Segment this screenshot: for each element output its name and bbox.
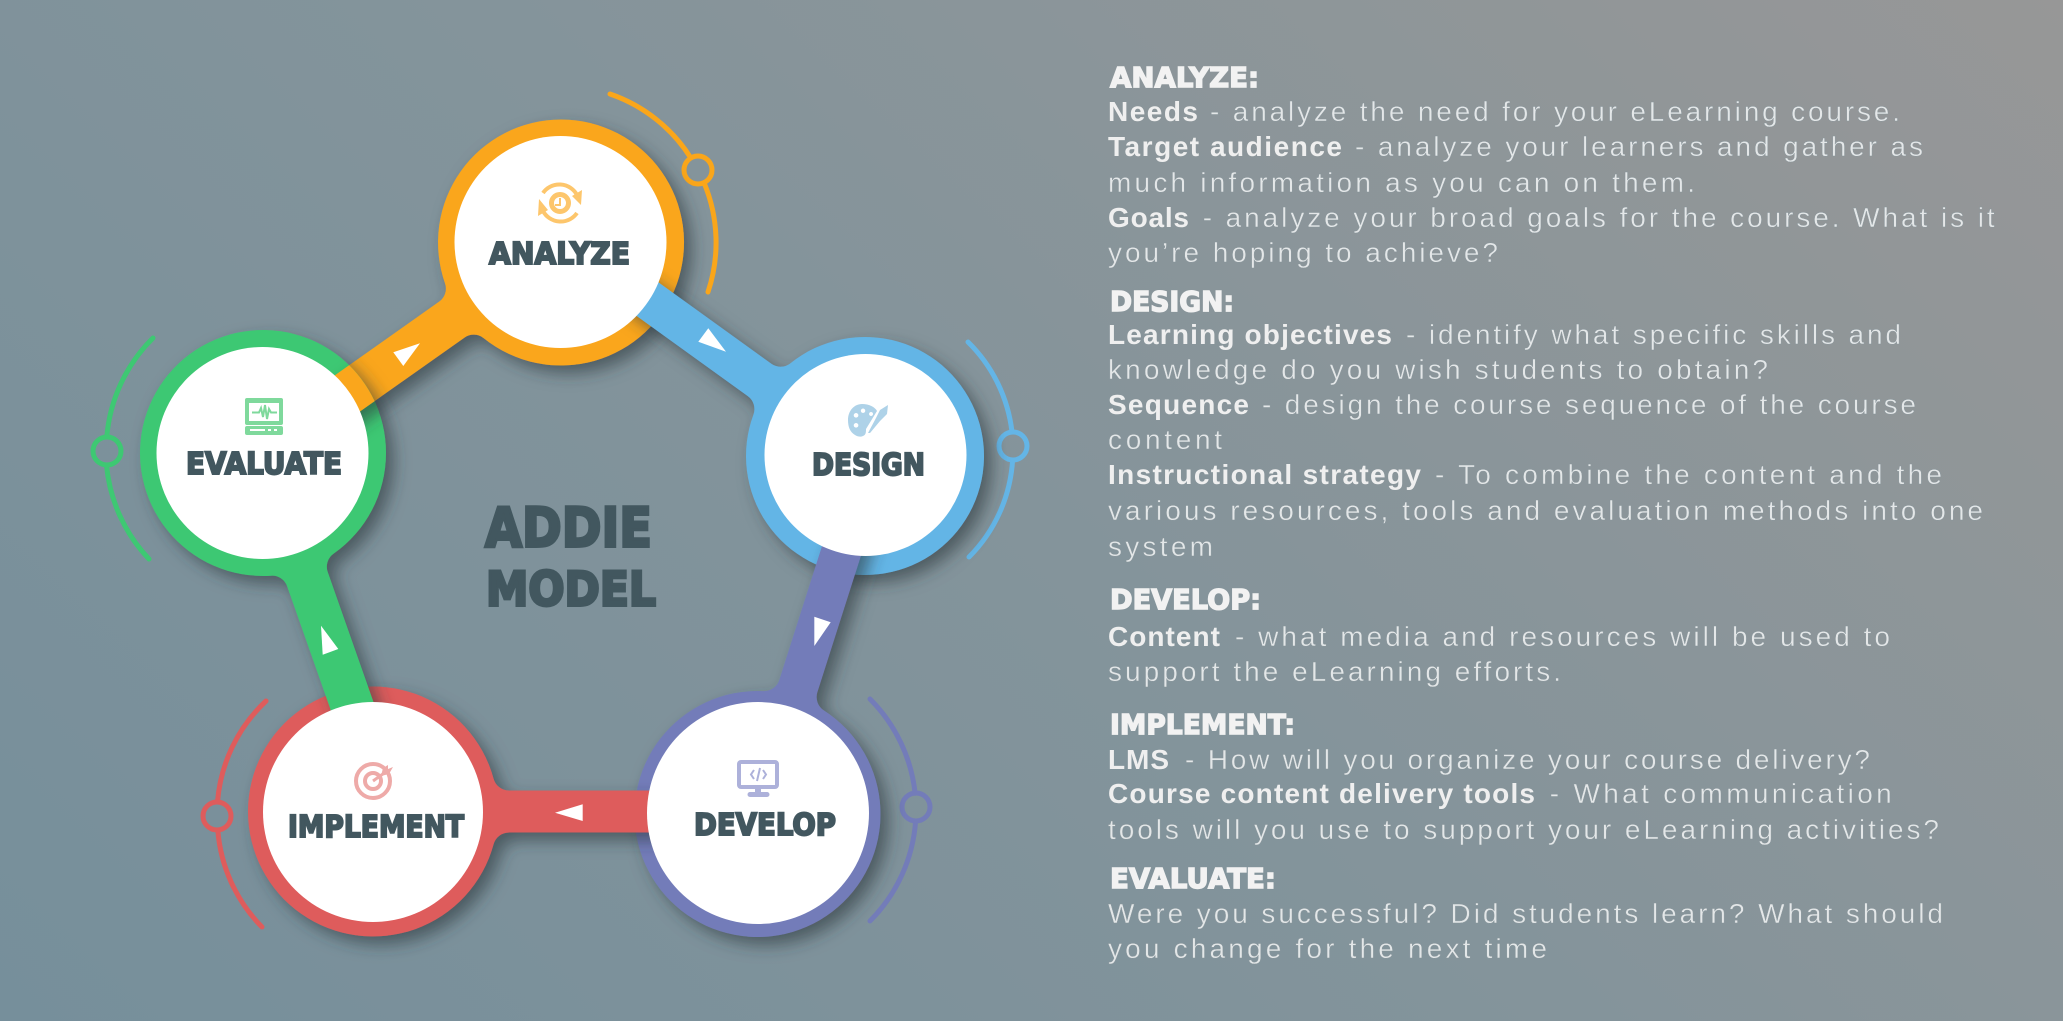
heading: implement: IMPLEMENT: — [1110, 708, 1295, 741]
ring and connector: analyze — [241, 71, 732, 519]
label: design: DESIGN — [812, 448, 925, 483]
arrow: design to develop — [814, 617, 831, 646]
node: evaluate — [156, 347, 368, 559]
text block: analyze: - analyze your learners and gather as — [1355, 131, 1923, 162]
icon: pulse monitor — [245, 398, 283, 435]
text block: develop: - what media and resources will be used to — [1235, 621, 1890, 652]
arrow: develop to implement — [555, 804, 583, 821]
title: addie model: MODEL — [486, 562, 656, 618]
node: design — [764, 354, 966, 556]
ring and connector: develop — [603, 487, 967, 969]
text block: analyze: Goals — [1108, 202, 1189, 233]
ring and connector: design — [552, 184, 1031, 622]
text block: analyze: Needs — [1108, 96, 1198, 127]
text block: design: Instructional strategy — [1108, 459, 1421, 490]
text block: design: various resources, tools and evaluation methods into one — [1108, 495, 1983, 526]
text block: design: - design the course sequence of the course — [1262, 389, 1916, 420]
text block: design: - identify what specific skills and — [1406, 319, 1901, 350]
text block: design: system — [1108, 531, 1213, 562]
text block: implement — [1108, 708, 1939, 845]
text block: analyze: - analyze the need for your eLearning course. — [1210, 96, 1900, 127]
text block: develop — [1108, 583, 1890, 687]
decorative arc: implement — [203, 701, 266, 927]
arrow: analyze to design — [698, 328, 726, 352]
decorative arc: evaluate — [93, 338, 153, 559]
decorative arc: analyze — [610, 94, 716, 292]
text block: implement: tools will you use to support your eLearning activities? — [1108, 814, 1939, 845]
icon: target — [356, 764, 393, 798]
text block: implement: - How will you organize your course delivery? — [1185, 744, 1870, 775]
text block: evaluate — [1108, 862, 1943, 964]
text block: design: content — [1108, 424, 1222, 455]
heading: design: DESIGN: — [1110, 285, 1234, 318]
text block: analyze: much information as you can on them. — [1108, 167, 1695, 198]
text block: design: knowledge do you wish students to obtain? — [1108, 354, 1768, 385]
text block: analyze: - analyze your broad goals for the course. What is it — [1203, 202, 1995, 233]
node: develop — [647, 702, 869, 924]
text block: analyze — [1108, 61, 1995, 268]
label: evaluate: EVALUATE — [186, 447, 342, 482]
text block: develop: support the eLearning efforts. — [1108, 656, 1561, 687]
title: addie model: ADDIE — [485, 496, 652, 560]
text block: design: Learning objectives — [1108, 319, 1392, 350]
heading: evaluate: EVALUATE: — [1110, 862, 1276, 895]
heading: develop: DEVELOP: — [1110, 583, 1261, 616]
text block: analyze: you’re hoping to achieve? — [1108, 237, 1498, 268]
label: implement: IMPLEMENT — [288, 810, 464, 845]
label: analyze: ANALYZE — [489, 237, 630, 272]
decorative arc: develop — [870, 699, 930, 921]
ring and connector: implement — [248, 686, 673, 936]
heading: analyze: ANALYZE: — [1110, 61, 1259, 94]
text block: design — [1108, 285, 1983, 562]
title: addie model — [485, 496, 656, 618]
icon: palette — [848, 404, 888, 437]
arrow: implement to evaluate — [321, 626, 338, 655]
text block: implement: LMS — [1108, 744, 1169, 775]
ring and connector: evaluate — [106, 296, 479, 777]
node: analyze — [454, 136, 666, 348]
arrow: evaluate to analyze — [393, 343, 420, 366]
text block: evaluate: you change for the next time — [1108, 933, 1547, 964]
orange connector overlapping evaluate ring — [334, 365, 382, 434]
text block: implement: Course content delivery tools — [1108, 778, 1535, 809]
text block: develop: Content — [1108, 621, 1220, 652]
icon: cycle clock — [538, 184, 582, 222]
icon: code monitor — [739, 762, 777, 794]
label: develop: DEVELOP — [694, 808, 836, 843]
text block: evaluate: Were you successful? Did students learn? What should — [1108, 898, 1943, 929]
text block: design: - To combine the content and the — [1435, 459, 1942, 490]
text block: analyze: Target audience — [1108, 131, 1342, 162]
decorative arc: design — [968, 342, 1027, 557]
node: implement — [263, 702, 483, 922]
text block: implement: - What communication — [1550, 778, 1892, 809]
text block: design: Sequence — [1108, 389, 1249, 420]
